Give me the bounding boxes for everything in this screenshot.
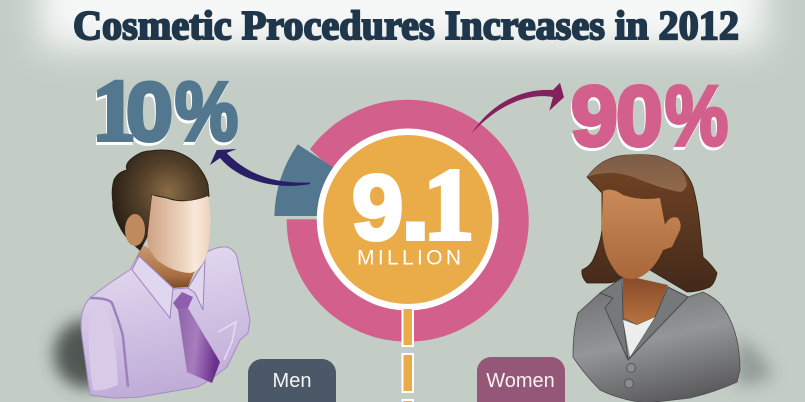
centre circle: 9.1 million: 9 <box>352 157 403 259</box>
sleeve highlight <box>89 305 118 390</box>
face <box>602 190 681 279</box>
label: women <box>477 357 565 402</box>
label: women: Women <box>486 370 555 392</box>
stat: 90% women: % <box>665 69 728 163</box>
label: men: Men <box>273 370 311 392</box>
segment: men 10% <box>274 144 334 216</box>
stat: 10% men: % <box>175 65 238 158</box>
arrow: to women <box>472 83 564 133</box>
hair cap <box>587 155 687 192</box>
title: Cosmetic Procedures Increases in 2012 <box>73 2 739 48</box>
jacket <box>573 278 740 402</box>
stat: 10% men: 1 <box>91 66 135 163</box>
neck <box>623 275 668 325</box>
stat: 90% women: 0 <box>616 69 663 163</box>
shadow <box>54 320 118 388</box>
stat: 10% men <box>91 63 238 163</box>
hair back <box>582 155 717 292</box>
stat: 90% women: 9 <box>570 72 617 166</box>
undershirt <box>623 317 655 357</box>
buttons <box>624 364 636 388</box>
segment: women 90% <box>287 100 529 342</box>
title glow panel <box>40 0 765 48</box>
collar <box>132 256 205 318</box>
label: men <box>248 359 336 402</box>
shadow <box>735 335 772 385</box>
stat: 90% women: 9 <box>571 69 618 163</box>
neck <box>136 245 196 288</box>
centre circle: 9.1 million: 1 <box>423 148 474 262</box>
dashed connector <box>402 308 413 402</box>
stat: 90% women <box>570 69 728 166</box>
stat: 10% men: 1 <box>92 63 136 160</box>
centre circle: 9.1 million: . <box>401 146 430 262</box>
ear <box>125 214 145 246</box>
stat: 90% women: 0 <box>615 72 662 166</box>
stat: 10% men: 0 <box>126 65 173 158</box>
tie <box>173 292 220 383</box>
stat: 10% men: 0 <box>125 68 172 161</box>
hair <box>112 150 209 250</box>
pocket <box>218 322 236 360</box>
stat: 90% women: % <box>664 72 727 166</box>
centre circle: 9.1 million: MILLION <box>357 246 461 270</box>
stat: 10% men: % <box>174 68 237 161</box>
centre circle: 9.1 million <box>317 128 499 310</box>
arrow: to men <box>210 149 310 186</box>
sleeve seam <box>90 298 128 387</box>
face <box>147 195 211 273</box>
woman figure <box>573 155 772 402</box>
shirt <box>81 247 250 398</box>
donut chart <box>274 100 529 342</box>
lapels <box>600 278 688 360</box>
man figure <box>54 150 250 398</box>
